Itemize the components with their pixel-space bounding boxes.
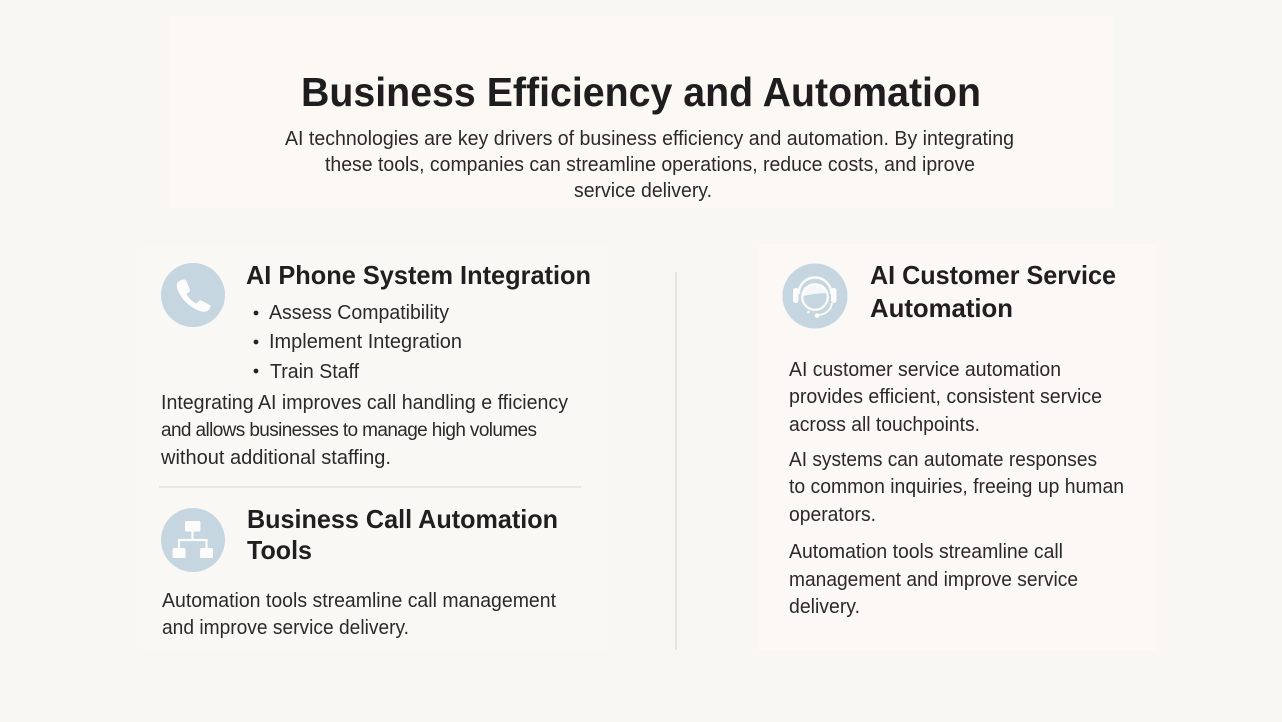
body text: automated responses: operators. <box>789 504 876 526</box>
bullet list: Train Staff <box>270 361 359 383</box>
panel: Business Call Automation Tools <box>161 504 558 639</box>
body text: call management: Automation tools streamline call <box>789 541 1063 563</box>
panel: left column background <box>140 245 608 652</box>
body text: and allows businesses to manage high volumes <box>161 420 537 441</box>
body text: Automation tools streamline call management <box>162 590 556 612</box>
icon: phone <box>161 263 225 327</box>
body text: automated responses: AI systems can automate responses <box>789 449 1097 471</box>
heading: Business Call Automation <box>247 504 558 534</box>
bullet list <box>254 302 462 383</box>
intro text: service delivery. <box>574 180 712 202</box>
body text: consistency <box>789 359 1102 436</box>
body text: and improve service delivery. <box>162 617 409 639</box>
body text: without additional staffing. <box>160 447 391 469</box>
panel: AI Phone System Integration <box>160 260 591 469</box>
heading <box>247 504 558 565</box>
intro text: these tools, companies can streamline operations, reduce costs, and iprove <box>325 154 975 176</box>
intro text: AI technologies are key drivers of business efficiency and automation. By integrating <box>285 128 1014 150</box>
body text <box>160 392 568 469</box>
body text: automated responses: to common inquiries, freeing up human <box>789 476 1124 498</box>
body text: consistency: across all touchpoints. <box>789 414 980 436</box>
title: Business Efficiency and Automation <box>301 69 981 115</box>
panel: header background <box>170 16 1113 208</box>
intro text <box>285 128 1014 202</box>
heading <box>870 260 1116 323</box>
heading: Automation <box>870 293 1013 323</box>
panel: right column background <box>758 244 1155 651</box>
icon: flow chart <box>161 508 225 572</box>
body text: call management: delivery. <box>789 596 860 618</box>
body text: Integrating AI improves call handling e fficiency <box>161 392 568 414</box>
bullet list: Implement Integration <box>269 331 462 353</box>
body text: consistency: provides efficient, consistent service <box>789 386 1102 408</box>
bullet list: Assess Compatibility <box>269 302 449 324</box>
panel: AI Customer Service Automation <box>782 260 1124 618</box>
body text: consistency: AI customer service automation <box>789 359 1061 381</box>
body text: call management <box>789 541 1078 618</box>
heading: AI Customer Service <box>870 260 1116 290</box>
icon: headset agent <box>782 264 848 328</box>
heading: Tools <box>247 535 312 565</box>
body text: automated responses <box>789 449 1124 526</box>
heading: AI Phone System Integration <box>246 260 591 290</box>
body text <box>162 590 556 639</box>
body text: call management: management and improve service <box>789 569 1078 591</box>
